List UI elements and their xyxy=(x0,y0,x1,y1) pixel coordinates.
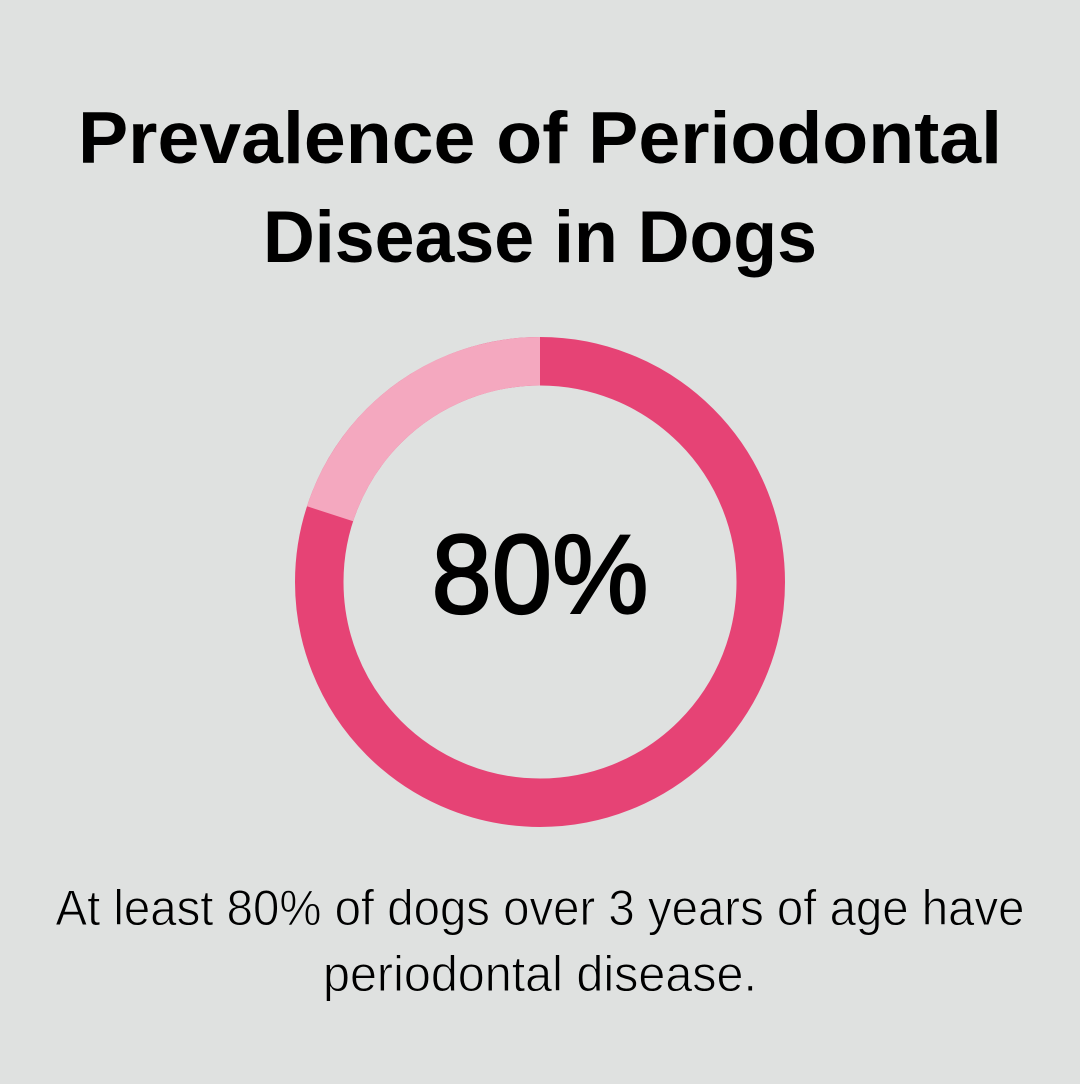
caption: periodontal disease. xyxy=(323,946,757,1002)
caption: At least 80% of dogs over 3 years of age have xyxy=(56,880,1024,936)
title xyxy=(78,98,1002,278)
caption xyxy=(56,880,1024,1002)
title: Disease in Dogs xyxy=(263,197,817,278)
title: Prevalence of Periodontal xyxy=(78,98,1002,179)
donut chart: 80% xyxy=(319,361,761,803)
remaining 20% segment xyxy=(330,361,540,514)
center value: 80% xyxy=(432,512,648,637)
